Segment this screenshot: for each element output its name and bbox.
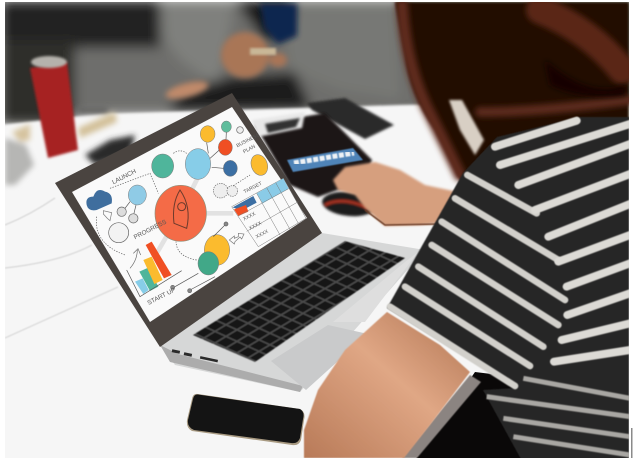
faint spokes	[157, 173, 233, 253]
diagram labels: PROGRESS	[133, 219, 168, 241]
diagram labels: PLAN	[242, 144, 257, 155]
thin gray mark at lower right	[631, 428, 632, 458]
bare arm	[304, 312, 470, 458]
notebook and dark objects behind laptop	[252, 98, 394, 197]
double arrow	[229, 233, 244, 244]
striped shirt	[387, 117, 630, 461]
bar chart	[127, 242, 182, 297]
cloud icon	[86, 190, 112, 210]
blurred background: seated person and room	[5, 2, 629, 338]
diagram labels: TARGET	[243, 181, 263, 195]
hand on mouse	[333, 162, 458, 226]
diagram labels	[111, 132, 270, 307]
red can	[30, 56, 78, 158]
keyboard	[193, 241, 405, 362]
blurred items on the table, left	[5, 108, 135, 185]
diagram labels: START UP	[146, 287, 177, 307]
black table gap under arm	[402, 372, 522, 458]
lid bezel	[55, 93, 322, 347]
connectors	[96, 132, 250, 290]
down arrow	[103, 211, 112, 221]
laptop ports	[172, 349, 218, 362]
paper glimpse beside hair	[449, 100, 484, 155]
faint table reflections	[5, 198, 118, 338]
lower back stripes	[487, 378, 630, 455]
trackpad	[271, 325, 368, 390]
laptop lid and screen	[55, 93, 322, 347]
diagram labels: XXXX	[242, 211, 257, 222]
hair	[395, 2, 629, 186]
diagram labels: BUSINESS	[236, 132, 261, 149]
satellite circles	[128, 121, 270, 275]
target table	[232, 178, 306, 247]
body stripes	[495, 121, 630, 362]
blue tie	[260, 4, 297, 44]
smartphone on table	[187, 394, 304, 445]
screen	[72, 107, 307, 322]
diagram labels: LAUNCH	[111, 168, 138, 186]
small gears and globe	[109, 127, 243, 293]
rocket circle	[155, 185, 206, 241]
mouse	[321, 189, 377, 219]
diagram labels: XXXX	[248, 220, 263, 232]
palm rest	[362, 297, 384, 322]
diagram labels: XXXX	[255, 228, 270, 240]
table edge	[5, 102, 629, 136]
laptop base	[160, 233, 425, 392]
sleeve stripes	[390, 175, 565, 386]
notebook label	[287, 148, 363, 172]
hands and phone of background person	[164, 32, 287, 102]
screen diagram	[86, 121, 306, 307]
